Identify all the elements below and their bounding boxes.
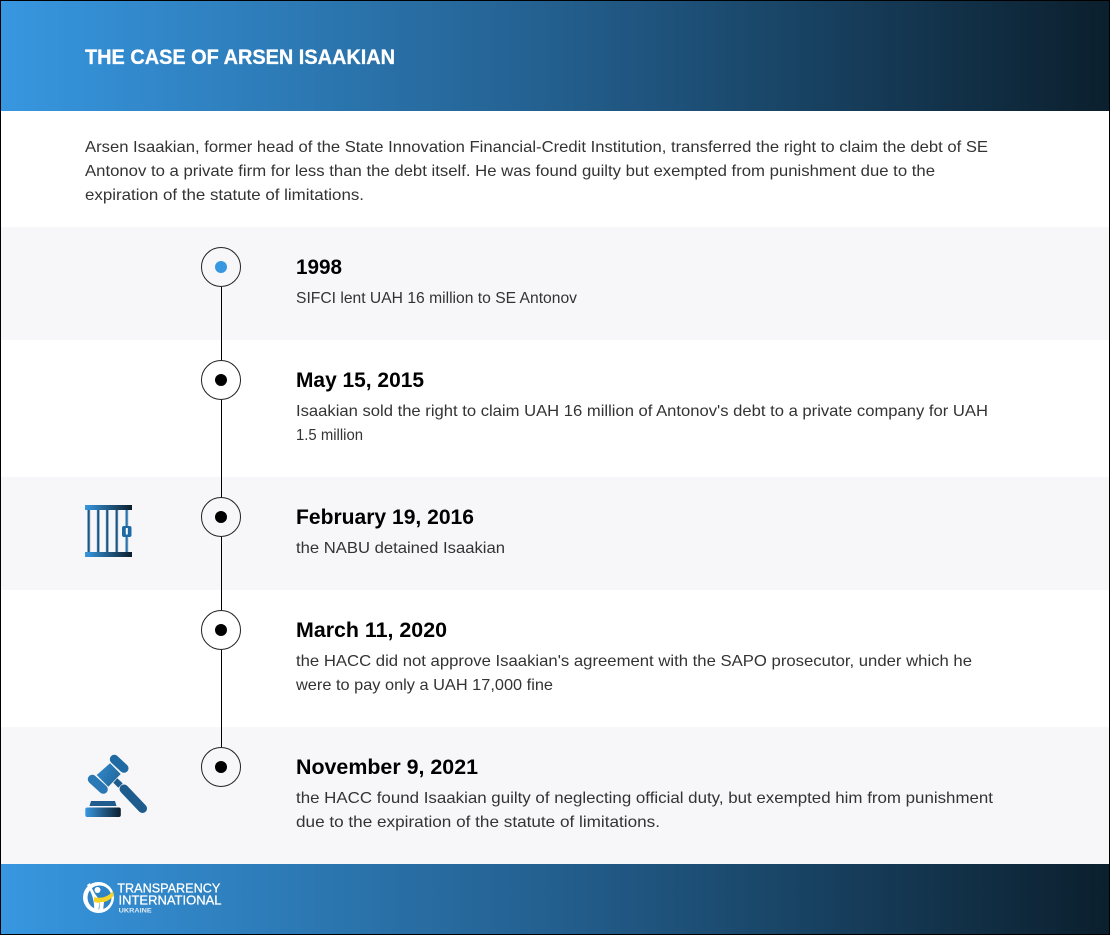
event: May 15, 2015 (202, 360, 988, 444)
title: THE CASE OF ARSEN ISAAKIAN (85, 46, 395, 69)
marker: 1998 (202, 248, 240, 286)
text: February 19, 2016: the NABU detained Isaakian (296, 540, 505, 557)
event: March 11, 2020 (202, 610, 972, 694)
logo: Transparency International Ukraine (83, 882, 222, 914)
marker: February 19, 2016 (202, 498, 240, 536)
marker: May 15, 2015 (202, 360, 240, 400)
text: May 15, 2015: Isaakian sold the right to claim UAH 16 million of Antonov's debt to a private company for UAH (296, 403, 988, 420)
intro text: expiration of the statute of limitations. (85, 187, 364, 204)
logo: Transparency International Ukraine: UKRAINE (119, 908, 152, 914)
text: November 9, 2021: the HACC found Isaakian guilty of neglecting official duty, but exempted him from punishment (296, 790, 994, 807)
marker: November 9, 2021 (202, 748, 240, 786)
text: November 9, 2021 (296, 790, 994, 831)
text: May 15, 2015 (296, 403, 988, 444)
text: November 9, 2021: due to the expiration of the statute of limitations. (296, 814, 660, 831)
text: March 11, 2020: the HACC did not approve Isaakian's agreement with the SAPO prosecutor, under which he (296, 653, 972, 670)
event: November 9, 2021 (85, 748, 994, 831)
icon: prison bars (85, 505, 132, 557)
logo: Transparency International Ukraine: TRANSPARENCY (117, 882, 221, 896)
marker: March 11, 2020 (202, 610, 240, 650)
timeline axis (221, 287, 222, 747)
text: March 11, 2020: were to pay only a UAH 17,000 fine (295, 677, 553, 694)
heading: 1998: 1998 (296, 256, 342, 279)
header banner (0, 0, 1110, 111)
event: 1998 (202, 248, 577, 307)
icon: gavel (85, 759, 142, 817)
logo: Transparency International Ukraine: INTERNATIONAL (118, 892, 222, 908)
row backgrounds (0, 227, 1110, 864)
intro text (85, 139, 988, 204)
event: February 19, 2016 (85, 498, 505, 557)
heading: November 9, 2021: November 9, 2021 (296, 756, 478, 779)
heading: March 11, 2020: March 11, 2020 (296, 619, 447, 642)
footer banner (0, 864, 1110, 935)
heading: February 19, 2016: February 19, 2016 (296, 506, 474, 529)
intro text: Arsen Isaakian, former head of the State Innovation Financial-Credit Institution, transferred the right to claim the debt of SE (85, 139, 988, 156)
text: March 11, 2020 (295, 653, 972, 694)
heading: May 15, 2015: May 15, 2015 (296, 369, 424, 392)
text: 1998: SIFCI lent UAH 16 million to SE Antonov (296, 290, 577, 307)
text: May 15, 2015: 1.5 million (296, 427, 363, 444)
intro text: Antonov to a private firm for less than the debt itself. He was found guilty but exempted from punishment due to the (85, 163, 935, 180)
